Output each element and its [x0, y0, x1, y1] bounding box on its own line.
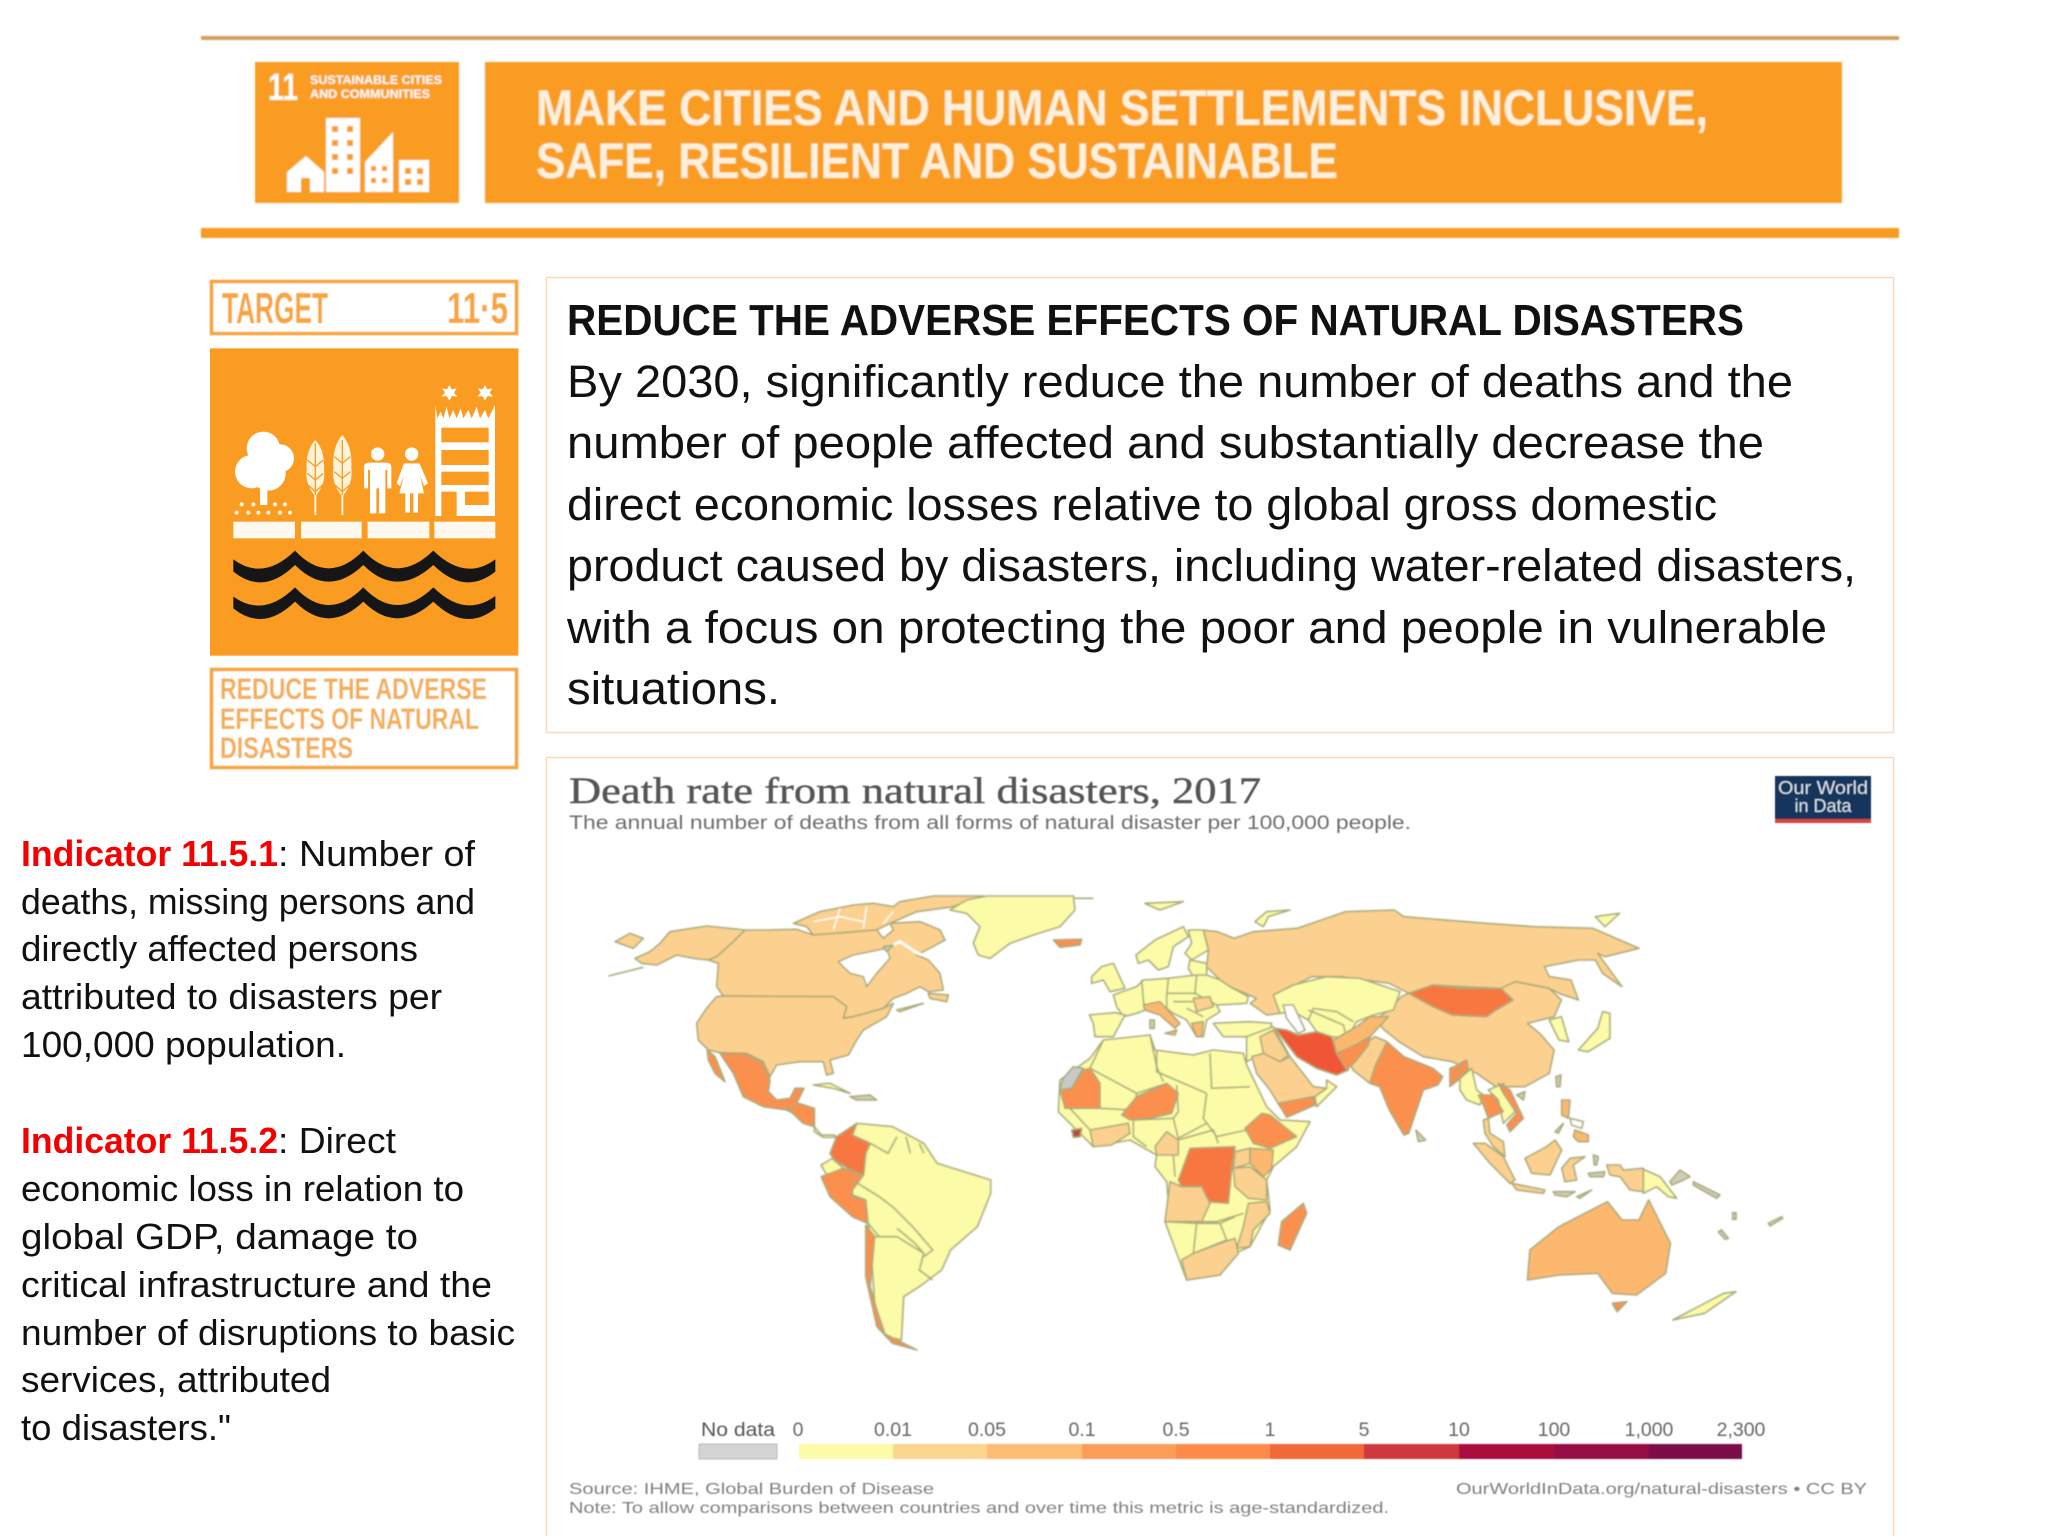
- legend: [699, 1419, 1766, 1459]
- target caption box: [212, 670, 516, 768]
- legend: colour scale: 2,300: [1717, 1419, 1766, 1441]
- target label box: TARGET: [222, 284, 328, 333]
- legend: colour scale: 10: [1448, 1419, 1470, 1441]
- icon: SDG 11 tile: SUSTAINABLE CITIES: [310, 73, 442, 87]
- indicators text block: [21, 833, 515, 1448]
- indicator 11.5.2: to disasters.": [21, 1407, 231, 1448]
- target caption box: REDUCE THE ADVERSE: [220, 673, 487, 706]
- map subtitle: The annual number of deaths from all forms of natural disaster per 100,000 people.: [569, 813, 1411, 834]
- map source note: Note: To allow comparisons between countries and over time this metric is age-standardized.: [569, 1500, 1389, 1517]
- legend: colour scale: 0.5: [1162, 1419, 1190, 1441]
- description text: By 2030, significantly reduce the number of deaths and the: [567, 356, 1793, 407]
- description text: product caused by disasters, including water-related disasters,: [567, 540, 1856, 591]
- description text: number of people affected and substantially decrease the: [567, 417, 1764, 468]
- map: Southeast Asia and Pacific islands: [1460, 1060, 1783, 1239]
- goal banner title: [485, 62, 1842, 203]
- map title: Death rate from natural disasters, 2017: [569, 771, 1261, 812]
- goal banner title: MAKE CITIES AND HUMAN SETTLEMENTS INCLUSIVE,: [536, 80, 1708, 136]
- description text: situations.: [567, 663, 780, 714]
- panel: target description: [546, 278, 1894, 732]
- indicator 11.5.2: economic loss in relation to: [21, 1168, 464, 1209]
- legend: colour scale: 1: [1265, 1419, 1275, 1441]
- target label box: 11·5: [447, 284, 508, 333]
- legend: colour scale: 0.1: [1068, 1419, 1096, 1441]
- icon: man and woman: [364, 447, 428, 513]
- goal banner title: SAFE, RESILIENT AND SUSTAINABLE: [536, 133, 1338, 189]
- icon: SDG 11 tile: [255, 62, 459, 203]
- map source note: OurWorldInData.org/natural-disasters • CC BY: [1456, 1481, 1867, 1498]
- legend: colour scale: 100: [1538, 1419, 1570, 1441]
- indicator 11.5.1: [21, 833, 476, 1065]
- indicator 11.5.1: directly affected persons: [21, 928, 418, 969]
- target caption box: EFFECTS OF NATURAL: [220, 703, 479, 736]
- heading: REDUCE THE ADVERSE EFFECTS OF NATURAL DISASTERS: [567, 296, 1744, 345]
- indicator 11.5.1: attributed to disasters per: [21, 976, 442, 1017]
- logo: Our World in Data: Our World: [1778, 778, 1868, 798]
- icon: SDG 11 tile: 11: [268, 67, 298, 109]
- description text: [566, 356, 1856, 714]
- map: South America: [788, 1103, 991, 1350]
- map: Europe and Middle East: [1089, 902, 1400, 1117]
- map: North America and Greenland: [608, 896, 1093, 1120]
- indicator 11.5.1: 100,000 population.: [21, 1024, 346, 1065]
- icon: black waves: [233, 551, 495, 619]
- description text: with a focus on protecting the poor and people in vulnerable: [566, 602, 1827, 653]
- legend: colour scale: 0.01: [874, 1419, 912, 1441]
- legend: colour scale: 1,000: [1625, 1419, 1674, 1441]
- indicator 11.5.1: Indicator 11.5.1: [21, 833, 278, 874]
- icon: ground blocks: [233, 522, 495, 538]
- description text: direct economic losses relative to global gross domestic: [567, 479, 1717, 530]
- indicator 11.5.2: [21, 1120, 515, 1448]
- indicator 11.5.2: : Direct: [278, 1120, 396, 1161]
- indicator 11.5.2: critical infrastructure and the: [21, 1264, 492, 1305]
- legend: colour scale: [793, 1419, 1766, 1459]
- target label box: [212, 282, 516, 334]
- map: Russia and East Asia: [1203, 910, 1736, 1320]
- legend: no data swatch: [699, 1420, 777, 1459]
- indicator 11.5.2: number of disruptions to basic: [21, 1312, 515, 1353]
- icon: target 11.5 tile: [210, 348, 518, 656]
- indicator 11.5.2: services, attributed: [21, 1359, 331, 1400]
- target caption box: DISASTERS: [220, 732, 353, 765]
- icon: tree: [235, 432, 294, 515]
- icon: flooding building: [435, 385, 495, 517]
- legend: colour scale: 0.05: [968, 1419, 1006, 1441]
- logo: Our World in Data: [1775, 776, 1871, 823]
- map: Africa: [1058, 1035, 1310, 1280]
- logo: Our World in Data: in Data: [1794, 796, 1852, 816]
- legend: colour scale: 5: [1359, 1419, 1370, 1441]
- icon: SDG 11 tile: AND COMMUNITIES: [310, 87, 430, 101]
- map source note: Source: IHME, Global Burden of Disease: [569, 1481, 934, 1498]
- indicator 11.5.2: global GDP, damage to: [21, 1216, 418, 1257]
- indicator 11.5.1: deaths, missing persons and: [21, 881, 475, 922]
- legend: no data swatch: No data: [701, 1420, 775, 1441]
- icon: wheat stalks: [306, 435, 352, 515]
- legend: colour scale: 0: [793, 1419, 804, 1441]
- indicator 11.5.1: : Number of: [278, 833, 476, 874]
- world map: [608, 896, 1783, 1350]
- indicator 11.5.2: Indicator 11.5.2: [21, 1120, 278, 1161]
- header banner: [201, 36, 1899, 238]
- map source note: [569, 1481, 1867, 1517]
- panel: death rate map: [546, 758, 1894, 1536]
